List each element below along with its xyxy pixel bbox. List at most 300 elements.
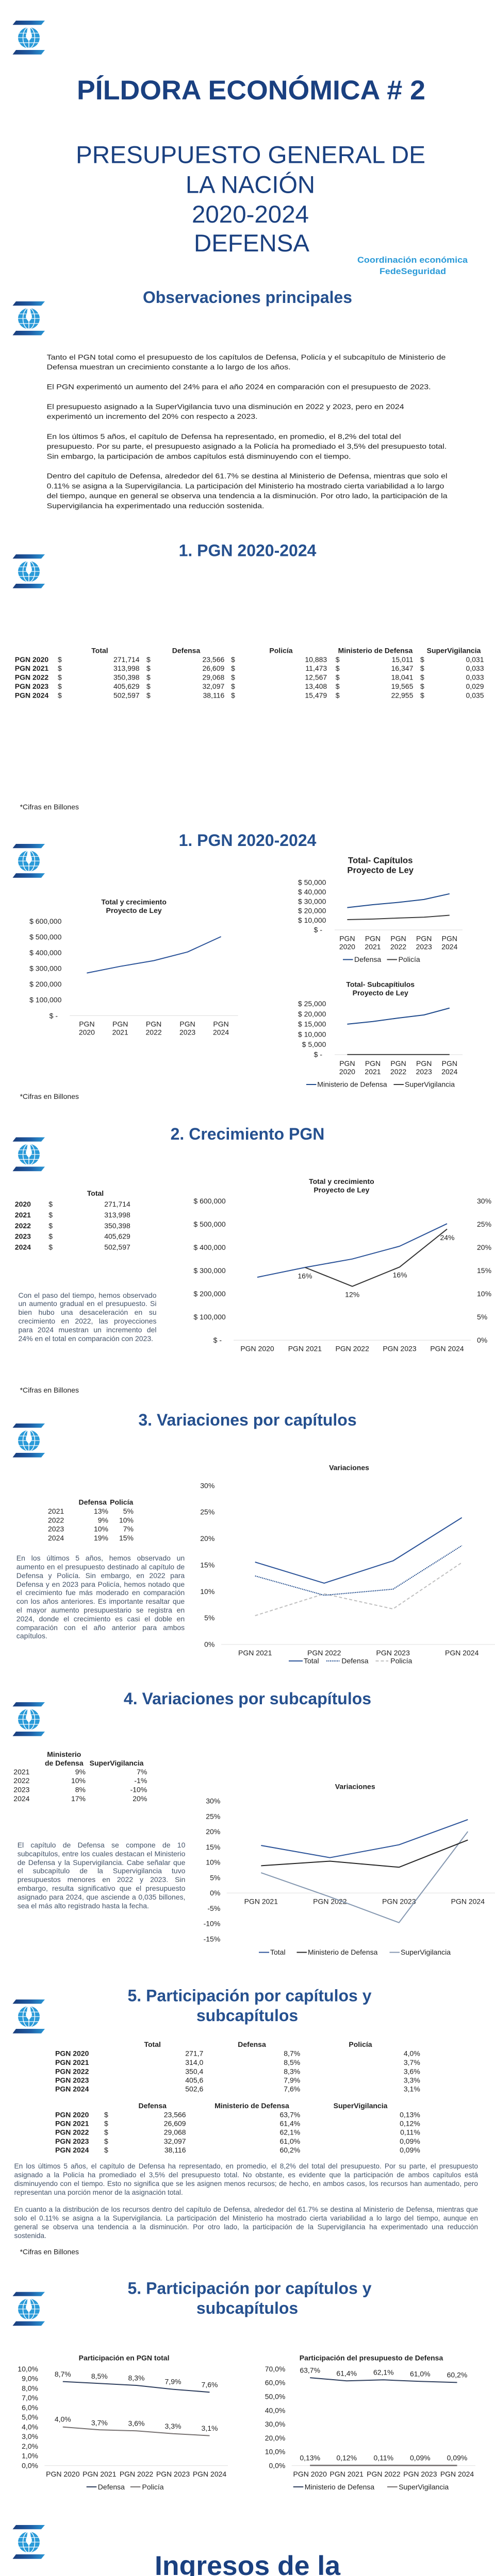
table: variaciones subcapítulos: 2022 xyxy=(13,1776,30,1785)
text block: análisis de capítulos xyxy=(16,1554,185,1641)
text block: análisis de crecimiento: crecimiento en 2022, las proyecciones xyxy=(19,1317,157,1325)
table: participación en PGN: Total xyxy=(144,2040,161,2048)
icon: logo xyxy=(12,1999,45,2033)
table: participación en Defensa: 61,4% xyxy=(279,2119,300,2127)
line chart: total y crecimiento con doble eje: $ - xyxy=(213,1336,222,1344)
table: participación en PGN: 3,3% xyxy=(404,2076,420,2084)
table: variaciones defensa y policía: 13% xyxy=(94,1507,108,1515)
text block: análisis de subcapítulos: sea el más alto registrado hasta la fecha. xyxy=(18,1902,149,1910)
text block: distribución dentro de Defensa: general se observa una tendencia a la disminución. Por otro lado, la participación de la Supervigilancia ha experimentado una reducción xyxy=(14,2223,478,2231)
line chart: total y crecimiento con doble eje: 0% xyxy=(477,1336,487,1344)
line chart: variaciones: Variaciones xyxy=(329,1464,369,1472)
line chart: participación en PGN total: 3,7% xyxy=(91,2418,108,2427)
table: participación en Defensa: 0,09% xyxy=(400,2137,420,2145)
table: total: $ xyxy=(48,1232,53,1241)
table: PGN por capítulos: PGN 2023 xyxy=(15,682,48,690)
line chart: participación del presupuesto de Defensa: 40,0% xyxy=(265,2406,285,2414)
line chart: participación del presupuesto de Defensa: 63,7% xyxy=(300,2366,320,2374)
line chart: total y crecimiento con doble eje: 16% xyxy=(298,1272,312,1280)
line chart: total y crecimiento: 2021 xyxy=(112,1028,128,1037)
table: participación en PGN: 7,6% xyxy=(284,2085,300,2093)
subtitle: 2020-2024 xyxy=(192,200,309,228)
text block: distribución dentro de Defensa: solo el 0.11% se asigna a la Supervigilancia. La participación del Ministerio ha mostrado cierta variabilidad a lo largo del tiempo, aunque en xyxy=(14,2214,478,2222)
line chart: participación del presupuesto de Defensa: SuperVigilancia xyxy=(399,2483,449,2491)
line chart: total y crecimiento xyxy=(29,898,238,1037)
line chart: total subcapítulos: PGN xyxy=(390,1059,406,1067)
table: total: 271,714 xyxy=(104,1200,130,1208)
table: participación en PGN: 271,7 xyxy=(185,2049,204,2058)
footnote: *Cifras en Billones xyxy=(20,1386,79,1394)
line chart: total subcapítulos: $ 20,000 xyxy=(298,1010,326,1018)
line chart: participación del presupuesto de Defensa: 0,09% xyxy=(447,2454,467,2462)
text block: análisis de crecimiento xyxy=(19,1291,157,1344)
line chart: participación en PGN total: 2,0% xyxy=(22,2442,38,2450)
table: PGN por capítulos: SuperVigilancia xyxy=(427,646,481,654)
line chart: variaciones: 30% xyxy=(200,1481,214,1489)
line chart: participación en PGN total: 8,7% xyxy=(55,2370,71,2378)
line chart: variaciones: 5% xyxy=(204,1614,214,1622)
table: PGN por capítulos: 0,033 xyxy=(466,673,484,681)
text block: análisis de subcapítulos: El capítulo de Defensa se compone de 10 xyxy=(18,1841,185,1849)
line chart: total y crecimiento: PGN xyxy=(112,1020,128,1028)
table: variaciones defensa y policía xyxy=(48,1498,134,1542)
line chart: total capítulos: $ 50,000 xyxy=(298,878,326,886)
text block: análisis de subcapítulos: de Defensa y la Supervigilancia. Cabe señalar que xyxy=(18,1858,185,1867)
icon: logo xyxy=(12,844,45,878)
line chart: total subcapítulos: 2023 xyxy=(416,1067,432,1076)
table: PGN por capítulos: PGN 2024 xyxy=(15,691,48,699)
line chart: total capítulos: PGN xyxy=(365,934,381,942)
panel: 5. participación tablas xyxy=(12,1987,478,2256)
heading: 5. Participación por capítulos y xyxy=(127,1987,372,2005)
line chart: total capítulos xyxy=(298,856,463,963)
table: participación en Defensa: Ministerio de Defensa xyxy=(214,2102,289,2110)
table: PGN por capítulos: $ xyxy=(420,673,424,681)
line chart: variaciones subcapítulos: PGN 2021 xyxy=(244,1897,278,1906)
table: PGN por capítulos: 23,566 xyxy=(202,655,225,664)
text block: observaciones: Dentro del capítulo de Defensa, alrededor del 61.7% se destina al Ministerio de Defensa, mientras que solo el xyxy=(47,472,448,480)
table: PGN por capítulos: 19,565 xyxy=(391,682,414,690)
text block: distribución dentro de Defensa: En cuanto a la distribución de los recursos dentro del capítulo de Defensa, alrededor del 61.7% se destina al Ministerio de Defensa, mientras que xyxy=(14,2206,478,2213)
line chart: total y crecimiento: $ 200,000 xyxy=(29,980,62,988)
table: participación en Defensa: 26,609 xyxy=(164,2119,186,2127)
line chart: total capítulos: PGN xyxy=(416,934,432,942)
line chart: variaciones: PGN 2022 xyxy=(307,1649,341,1657)
line chart: total capítulos: Defensa xyxy=(354,955,381,963)
text block: análisis de capítulos: el mayor aumento presupuestario se registra en xyxy=(16,1606,185,1614)
line chart: total subcapítulos: Proyecto de Ley xyxy=(353,989,408,997)
table: PGN por capítulos: Defensa xyxy=(172,646,200,654)
line chart: total y crecimiento: PGN xyxy=(79,1020,95,1028)
line chart: participación del presupuesto de Defensa: 20,0% xyxy=(265,2434,285,2442)
text block: análisis de subcapítulos: asignado para 2024, que asciende a 0,035 billones, xyxy=(18,1893,185,1901)
heading: 1. PGN 2020-2024 xyxy=(179,831,317,850)
text block: observaciones: del tiempo, aunque en general se observa una tendencia a la disminución. Por otro lado, la participación de la xyxy=(47,492,448,500)
icon: logo xyxy=(12,554,45,588)
table: participación en Defensa: PGN 2022 xyxy=(55,2128,89,2137)
line chart: total y crecimiento: $ 600,000 xyxy=(29,917,62,925)
line chart: total y crecimiento con doble eje: Total y crecimiento xyxy=(309,1177,374,1185)
text block: participación en el presupuesto: representan una porción menor de la asignación total. xyxy=(14,2189,183,2196)
table: participación en Defensa: 61,0% xyxy=(279,2137,300,2145)
icon: logo xyxy=(12,1138,45,1171)
table: PGN por capítulos: 38,116 xyxy=(203,691,225,699)
line chart: total subcapítulos: 2020 xyxy=(339,1067,355,1076)
line chart: participación del presupuesto de Defensa: PGN 2024 xyxy=(440,2470,474,2478)
panel: cover slide xyxy=(12,21,468,276)
line chart: participación del presupuesto de Defensa: 61,4% xyxy=(336,2369,357,2377)
credit xyxy=(357,255,468,276)
line chart: total y crecimiento: $ 100,000 xyxy=(29,996,62,1004)
text block: observaciones: 0.11% se asigna a la Supervigilancia. La participación del Ministerio ha mostrado cierta variabilidad a lo largo xyxy=(47,482,444,490)
line chart: variaciones subcapítulos: PGN 2024 xyxy=(451,1897,485,1906)
icon: logo xyxy=(12,1702,45,1736)
title: PÍLDORA ECONÓMICA # 2 xyxy=(77,75,425,106)
line chart: participación del presupuesto de Defensa: PGN 2023 xyxy=(403,2470,437,2478)
line chart: participación en PGN total: PGN 2024 xyxy=(193,2470,226,2478)
line chart: participación del presupuesto de Defensa: PGN 2020 xyxy=(293,2470,327,2478)
heading: 4. Variaciones por subcapítulos xyxy=(124,1689,371,1708)
text block: análisis de crecimiento: para 2024 muestran un incremento del xyxy=(19,1326,157,1334)
line chart: participación en PGN total xyxy=(18,2353,228,2491)
line chart: participación en PGN total: 4,0% xyxy=(55,2415,71,2424)
line chart: total capítulos: $ 30,000 xyxy=(298,897,326,905)
text block: análisis de capítulos: aumento en el presupuesto destinado al capítulo de xyxy=(16,1563,185,1571)
table: PGN por capítulos: $ xyxy=(336,673,340,681)
table: PGN por capítulos: 502,597 xyxy=(113,691,140,699)
table: PGN por capítulos: $ xyxy=(146,682,151,690)
line chart: total y crecimiento: $ - xyxy=(50,1011,58,1020)
text block: observaciones: Tanto el PGN total como el presupuesto de los capítulos de Defensa, Policía y el subcapítulo de Ministerio de xyxy=(47,353,446,361)
table: PGN por capítulos: $ xyxy=(231,673,235,681)
line chart: total y crecimiento con doble eje: PGN 2020 xyxy=(240,1345,274,1353)
table: total: 502,597 xyxy=(104,1243,130,1251)
line chart: total y crecimiento con doble eje: 16% xyxy=(393,1271,407,1279)
table: participación en Defensa: 62,1% xyxy=(279,2128,300,2137)
table: PGN por capítulos: PGN 2021 xyxy=(15,664,48,672)
table: variaciones subcapítulos: 9% xyxy=(75,1768,86,1776)
table: participación en PGN: 3,1% xyxy=(404,2085,420,2093)
table: PGN por capítulos: $ xyxy=(146,664,151,672)
table: PGN por capítulos: $ xyxy=(231,655,235,664)
line chart: participación en PGN total: 8,0% xyxy=(22,2384,38,2392)
line chart: participación del presupuesto de Defensa: 0,09% xyxy=(410,2454,431,2462)
line chart: total capítulos: Policía xyxy=(399,955,420,963)
table: participación en PGN: PGN 2020 xyxy=(55,2049,89,2058)
heading: 1. PGN 2020-2024 xyxy=(179,541,317,560)
line chart: variaciones: Policía xyxy=(390,1657,412,1665)
table: PGN por capítulos: $ xyxy=(231,664,235,672)
line chart: total capítulos: $ - xyxy=(314,925,322,934)
heading: Observaciones principales xyxy=(143,288,352,307)
text block: participación en el presupuesto xyxy=(14,2162,478,2197)
line chart: total y crecimiento con doble eje: $ 100,000 xyxy=(193,1313,226,1321)
line chart: participación en PGN total: PGN 2020 xyxy=(46,2470,80,2478)
text block: análisis de capítulos: el crecimiento fue más moderado en comparación xyxy=(16,1588,185,1597)
panel: 1. PGN charts xyxy=(12,831,463,1100)
heading xyxy=(127,1987,372,2025)
table: PGN por capítulos: 11,473 xyxy=(305,664,327,672)
table: PGN por capítulos: $ xyxy=(58,673,62,681)
table: PGN por capítulos: $ xyxy=(336,664,340,672)
table: participación en Defensa: 0,12% xyxy=(400,2119,420,2127)
line chart: total y crecimiento: Proyecto de Ley xyxy=(106,906,162,914)
line chart: total subcapítulos: PGN xyxy=(416,1059,432,1067)
table: PGN por capítulos: $ xyxy=(336,682,340,690)
line chart: participación en PGN total: 1,0% xyxy=(22,2452,38,2460)
table: PGN por capítulos: 18,041 xyxy=(391,673,414,681)
line chart: total y crecimiento: 2022 xyxy=(146,1028,162,1037)
icon: logo xyxy=(12,21,45,55)
table: total: $ xyxy=(48,1200,53,1208)
text block: análisis de crecimiento: bien hubo una desaceleración en su xyxy=(19,1308,157,1316)
line chart: participación del presupuesto de Defensa: 30,0% xyxy=(265,2420,285,2428)
table: PGN por capítulos: 16,347 xyxy=(391,664,414,672)
table: PGN por capítulos: $ xyxy=(58,664,62,672)
line chart: total capítulos: 2020 xyxy=(339,943,355,951)
line chart: participación en PGN total: Defensa xyxy=(98,2483,125,2491)
text block: análisis de capítulos: 2024, donde el crecimiento es casi el doble en xyxy=(16,1615,185,1623)
subtitle: PRESUPUESTO GENERAL DE xyxy=(76,141,425,168)
line chart: participación del presupuesto de Defensa: PGN 2022 xyxy=(367,2470,401,2478)
table: variaciones subcapítulos: SuperVigilancia xyxy=(90,1759,144,1767)
panel: observaciones principales xyxy=(12,288,448,510)
line chart: total y crecimiento: $ 300,000 xyxy=(29,964,62,973)
line chart: total y crecimiento con doble eje: $ 600,000 xyxy=(193,1197,226,1205)
table: participación en PGN: PGN 2021 xyxy=(55,2058,89,2066)
table: variaciones subcapítulos: Ministerio xyxy=(47,1750,81,1758)
table: variaciones defensa y policía: 2022 xyxy=(48,1516,64,1524)
table: PGN por capítulos: $ xyxy=(58,691,62,699)
line chart: total y crecimiento con doble eje: PGN 2024 xyxy=(430,1345,464,1353)
line chart: total y crecimiento con doble eje: PGN 2021 xyxy=(288,1345,322,1353)
text block: participación en el presupuesto: asignado a la Policía ha promediado el 3,5% del presupuesto total. No obstante, es evidente que la participación de ambos capítulos está xyxy=(14,2171,478,2179)
text block: análisis de capítulos: En los últimos 5 años, hemos observado un xyxy=(16,1554,185,1562)
text block: participación en el presupuesto: disminuyendo con el tiempo. Esto no significa que se les asignen menos recursos; de hecho, en ambos casos, los recursos han aumentado, pero xyxy=(14,2180,478,2188)
panel: 3. variaciones por capítulos xyxy=(12,1411,495,1665)
table: PGN por capítulos: 0,035 xyxy=(466,691,484,699)
line chart: variaciones subcapítulos xyxy=(204,1783,495,1956)
line chart: variaciones xyxy=(200,1464,495,1665)
table: participación en PGN: 8,5% xyxy=(284,2058,300,2066)
table: participación en Defensa: 23,566 xyxy=(164,2110,186,2119)
table: participación en Defensa: 32,097 xyxy=(164,2137,186,2145)
table: PGN por capítulos: $ xyxy=(146,673,151,681)
line chart: participación en PGN total: PGN 2023 xyxy=(156,2470,190,2478)
table: PGN por capítulos: 0,029 xyxy=(466,682,484,690)
line chart: total capítulos: 2023 xyxy=(416,943,432,951)
line chart: variaciones: Total xyxy=(304,1657,319,1665)
table: participación en PGN: 8,3% xyxy=(284,2067,300,2075)
line chart: total y crecimiento con doble eje xyxy=(193,1177,491,1353)
table: participación en Defensa: 29,068 xyxy=(164,2128,186,2137)
table: total: 2022 xyxy=(15,1222,31,1230)
line chart: total y crecimiento con doble eje: 25% xyxy=(477,1220,491,1228)
table: participación en Defensa: 0,13% xyxy=(400,2110,420,2119)
panel: 2. crecimiento PGN xyxy=(12,1125,491,1394)
line chart: total capítulos: PGN xyxy=(390,934,406,942)
text block: análisis de subcapítulos: el subcapítulo de la Supervigilancia tuvo xyxy=(18,1867,185,1875)
line chart: total subcapítulos: SuperVigilancia xyxy=(405,1080,455,1089)
text block: observaciones: Sin embargo, la participación de ambos capítulos está disminuyendo con el tiempo. xyxy=(47,452,351,460)
table: variaciones subcapítulos: 17% xyxy=(71,1794,86,1803)
table: participación en Defensa: PGN 2024 xyxy=(55,2146,89,2154)
line chart: total subcapítulos: PGN xyxy=(365,1059,381,1067)
line chart: total capítulos: $ 10,000 xyxy=(298,916,326,924)
text block: análisis de capítulos: capítulos. xyxy=(16,1632,47,1640)
line chart: total capítulos: $ 20,000 xyxy=(298,907,326,915)
heading: 5. Participación por capítulos y xyxy=(127,2279,372,2298)
text block: distribución dentro de Defensa: sostenida. xyxy=(14,2232,46,2240)
table: variaciones defensa y policía: 19% xyxy=(94,1534,108,1542)
table: participación en PGN: 3,6% xyxy=(404,2067,420,2075)
text block: observaciones: En los últimos 5 años, el capítulo de Defensa ha representado, en promedio, el 8,2% del total del xyxy=(47,432,401,440)
credit: FedeSeguridad xyxy=(380,266,446,276)
line chart: participación en PGN total: Participación en PGN total xyxy=(79,2353,170,2362)
table: participación en PGN: 502,6 xyxy=(185,2085,204,2093)
line chart: participación del presupuesto de Defensa: 10,0% xyxy=(265,2448,285,2456)
line chart: total y crecimiento: 2020 xyxy=(79,1028,95,1037)
line chart: variaciones: 0% xyxy=(204,1640,214,1649)
table: variaciones subcapítulos: 8% xyxy=(75,1786,86,1794)
line chart: participación del presupuesto de Defensa xyxy=(265,2353,475,2491)
table: variaciones subcapítulos: 2023 xyxy=(13,1786,30,1794)
line chart: participación en PGN total: 3,0% xyxy=(22,2432,38,2441)
line chart: total capítulos: PGN xyxy=(339,934,355,942)
line chart: participación en PGN total: 8,3% xyxy=(128,2374,144,2382)
line chart: total subcapítulos: $ - xyxy=(314,1050,322,1059)
line chart: total capítulos: PGN xyxy=(442,934,457,942)
footnote: *Cifras en Billones xyxy=(20,1092,79,1100)
heading: subcapítulos xyxy=(196,2299,298,2317)
line chart: participación del presupuesto de Defensa: 50,0% xyxy=(265,2393,285,2401)
line chart: total y crecimiento: $ 500,000 xyxy=(29,933,62,941)
line chart: variaciones subcapítulos: 15% xyxy=(206,1843,220,1851)
line chart: variaciones: 15% xyxy=(200,1561,214,1569)
line chart: total subcapítulos: $ 25,000 xyxy=(298,999,326,1008)
table: PGN por capítulos: 0,031 xyxy=(466,655,484,664)
table: variaciones subcapítulos: -1% xyxy=(134,1776,147,1785)
line chart: total y crecimiento con doble eje: 12% xyxy=(345,1290,359,1298)
line chart: total subcapítulos: $ 5,000 xyxy=(302,1040,326,1048)
text block: análisis de capítulos: Defensa y Policía. Sin embargo, en 2022 para xyxy=(16,1571,185,1580)
text block: análisis de capítulos: comparación con el año anterior para ambos xyxy=(16,1623,185,1632)
line chart: variaciones: PGN 2024 xyxy=(445,1649,479,1657)
line chart: participación en PGN total: PGN 2022 xyxy=(120,2470,153,2478)
table: PGN por capítulos: 26,609 xyxy=(202,664,225,672)
table: total: 405,629 xyxy=(104,1232,130,1241)
line chart: total y crecimiento: PGN xyxy=(179,1020,195,1028)
table: PGN por capítulos: $ xyxy=(420,691,424,699)
table: PGN por capítulos: $ xyxy=(58,682,62,690)
text block: análisis de subcapítulos: presupuestos menores en 2022 y 2023. Sin xyxy=(18,1875,185,1884)
line chart: total subcapítulos: $ 15,000 xyxy=(298,1020,326,1028)
line chart: participación del presupuesto de Defensa: 60,0% xyxy=(265,2379,285,2387)
line chart: variaciones subcapítulos: PGN 2023 xyxy=(382,1897,416,1906)
table: participación en Defensa: SuperVigilancia xyxy=(334,2102,388,2110)
text block: análisis de capítulos: con los años anteriores. Es importante resaltar que xyxy=(16,1597,185,1605)
table: total: $ xyxy=(48,1211,53,1219)
table: PGN por capítulos: Ministerio de Defensa xyxy=(338,646,413,654)
panel: 4. variaciones por subcapítulos xyxy=(12,1689,495,1956)
table: variaciones subcapítulos: -10% xyxy=(130,1786,147,1794)
line chart: total y crecimiento con doble eje: 20% xyxy=(477,1243,491,1251)
table: participación en PGN: Defensa xyxy=(238,2040,266,2048)
table: variaciones defensa y policía: 7% xyxy=(123,1525,134,1533)
table: participación en Defensa: $ xyxy=(104,2110,108,2119)
line chart: participación en PGN total: Policía xyxy=(142,2483,164,2491)
subtitle: DEFENSA xyxy=(194,229,310,257)
footnote: *Cifras en Billones xyxy=(20,803,79,811)
line chart: participación en PGN total: PGN 2021 xyxy=(82,2470,117,2478)
line chart: participación en PGN total: 8,5% xyxy=(91,2372,108,2380)
table: PGN por capítulos: Total xyxy=(91,646,108,654)
table: PGN por capítulos: $ xyxy=(146,655,151,664)
table: PGN por capítulos: $ xyxy=(336,655,340,664)
line chart: variaciones: 10% xyxy=(200,1587,214,1596)
line chart: participación del presupuesto de Defensa: 0,11% xyxy=(373,2454,393,2462)
table: PGN por capítulos: $ xyxy=(336,691,340,699)
line chart: total capítulos: 2022 xyxy=(390,943,406,951)
table: participación en PGN: Policía xyxy=(349,2040,372,2048)
panel: 1. PGN table xyxy=(12,541,484,811)
table: participación en PGN: 7,9% xyxy=(284,2076,300,2084)
text block: observaciones: experimentó un incremento del 20% con respecto a 2023. xyxy=(47,412,258,420)
table: variaciones subcapítulos: 2024 xyxy=(13,1794,30,1803)
table: participación en PGN: PGN 2023 xyxy=(55,2076,89,2084)
line chart: total y crecimiento: PGN xyxy=(213,1020,229,1028)
table: participación en PGN: 8,7% xyxy=(284,2049,300,2058)
line chart: participación del presupuesto de Defensa: 70,0% xyxy=(265,2365,285,2373)
icon: logo xyxy=(12,301,45,335)
line chart: variaciones: Defensa xyxy=(341,1657,369,1665)
line chart: total y crecimiento con doble eje: PGN 2023 xyxy=(383,1345,417,1353)
line chart: participación en PGN total: 7,9% xyxy=(165,2377,181,2385)
line chart: participación del presupuesto de Defensa: 0,12% xyxy=(336,2454,357,2462)
table: total: $ xyxy=(48,1243,53,1251)
line chart: total y crecimiento con doble eje: $ 400,000 xyxy=(193,1243,226,1251)
text block: análisis de crecimiento: un aumento gradual en el presupuesto. Si xyxy=(19,1299,157,1308)
table: PGN por capítulos: 15,011 xyxy=(392,655,414,664)
table: PGN por capítulos: $ xyxy=(420,664,424,672)
line chart: participación en PGN total: 3,6% xyxy=(128,2419,144,2428)
table: total: $ xyxy=(48,1222,53,1230)
table: variaciones subcapítulos: 20% xyxy=(133,1794,147,1803)
table: PGN por capítulos: 313,998 xyxy=(113,664,140,672)
line chart: total subcapítulos: 2022 xyxy=(390,1067,406,1076)
table: participación en PGN: 405,6 xyxy=(185,2076,204,2084)
table: participación en PGN: 4,0% xyxy=(404,2049,420,2058)
table: participación en Defensa: PGN 2023 xyxy=(55,2137,89,2145)
heading xyxy=(127,2279,372,2317)
text block: análisis de subcapítulos: subcapítulos, entre los cuales destacan el Ministerio xyxy=(18,1850,185,1858)
table: PGN por capítulos: $ xyxy=(231,691,235,699)
table: PGN por capítulos: 13,408 xyxy=(305,682,327,690)
line chart: total y crecimiento con doble eje: 10% xyxy=(477,1290,491,1298)
table: PGN por capítulos: PGN 2022 xyxy=(15,673,48,681)
table: participación en Defensa: $ xyxy=(104,2119,108,2127)
table: PGN por capítulos: 350,398 xyxy=(113,673,140,681)
table: PGN por capítulos: 15,479 xyxy=(305,691,327,699)
line chart: participación en PGN total: 6,0% xyxy=(22,2403,38,2412)
icon: logo xyxy=(12,1423,45,1458)
table: participación en Defensa xyxy=(55,2102,420,2154)
line chart: total y crecimiento con doble eje: Proyecto de Ley xyxy=(314,1185,370,1194)
line chart: total y crecimiento con doble eje: $ 500,000 xyxy=(193,1220,226,1228)
table: variaciones subcapítulos: de Defensa xyxy=(45,1759,84,1767)
line chart: variaciones: PGN 2021 xyxy=(238,1649,272,1657)
heading: 2. Crecimiento PGN xyxy=(171,1125,324,1143)
